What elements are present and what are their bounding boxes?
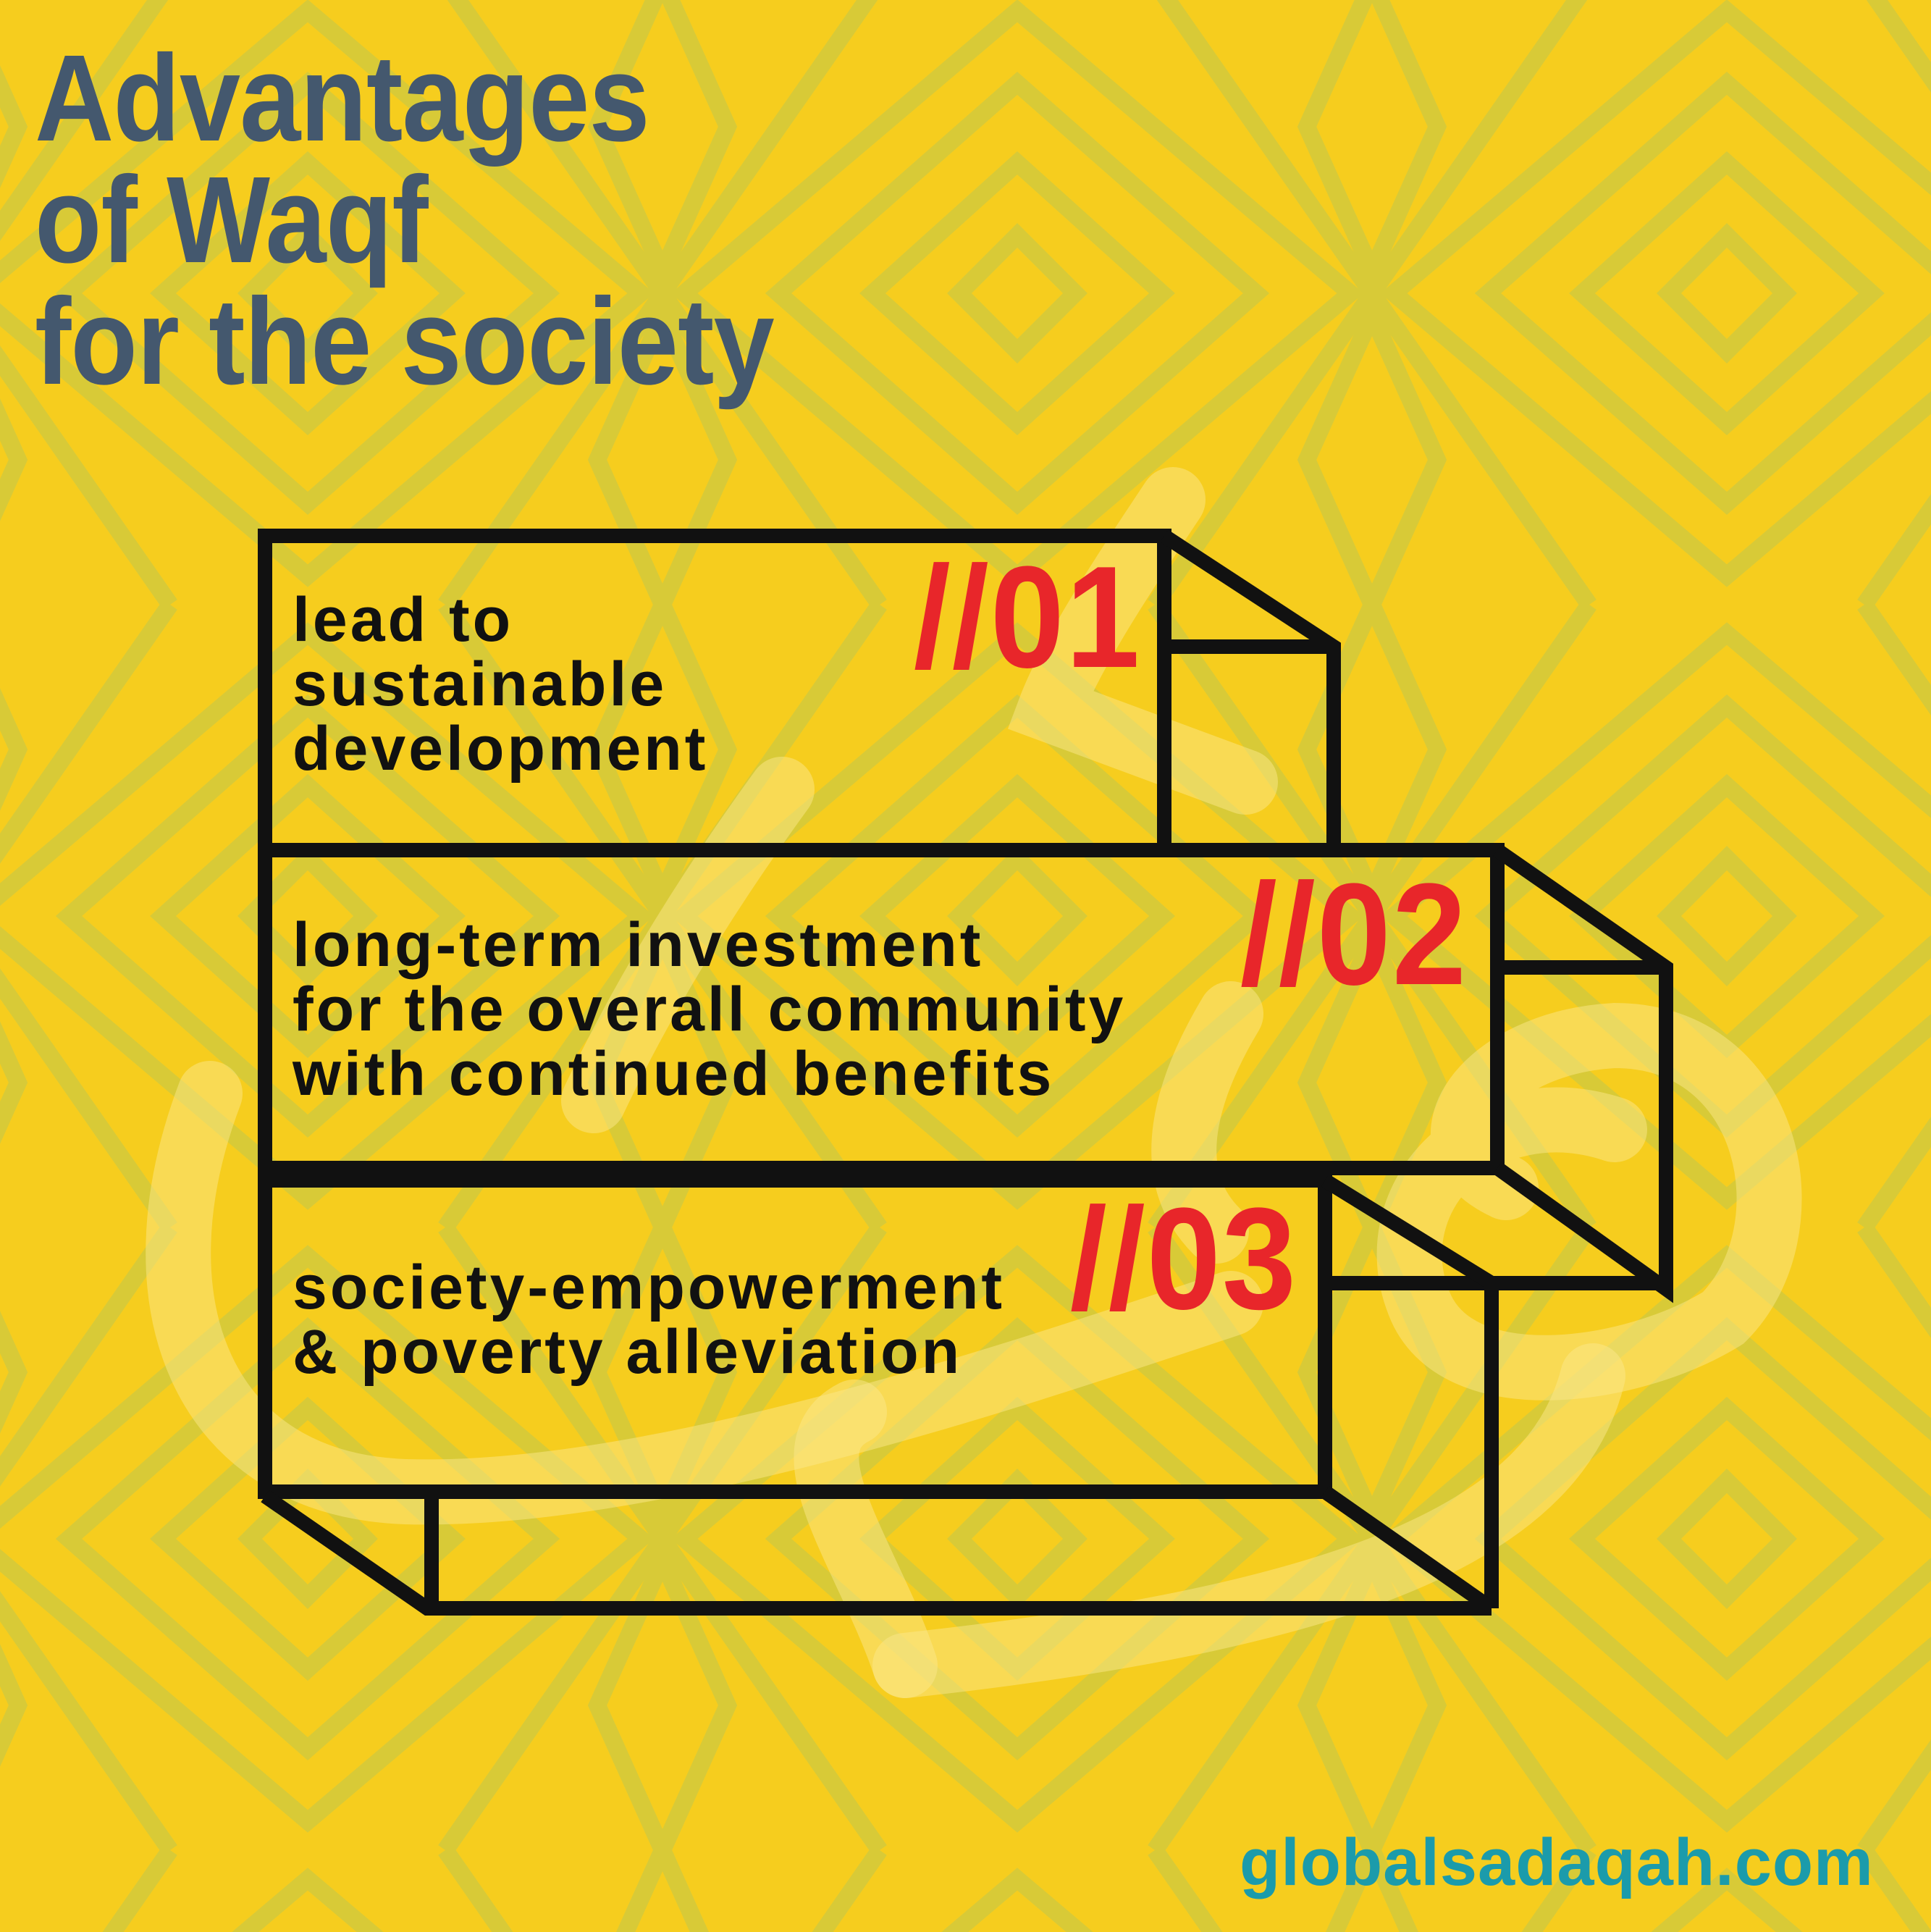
title: for the society bbox=[35, 273, 774, 411]
text 2: long-term investment bbox=[293, 910, 983, 980]
box 2 bbox=[265, 850, 1666, 1289]
title: of Waqf bbox=[35, 151, 428, 289]
number 03: //03 bbox=[1070, 1178, 1297, 1340]
text 3 bbox=[293, 1253, 1005, 1387]
text 2: for the overall community bbox=[293, 975, 1126, 1044]
text 3: & poverty alleviation bbox=[293, 1317, 962, 1387]
number 01: //01 bbox=[914, 537, 1141, 698]
text 1: development bbox=[293, 714, 708, 784]
text 3: society-empowerment bbox=[293, 1253, 1005, 1322]
text 1: sustainable bbox=[293, 650, 667, 719]
text 2: with continued benefits bbox=[293, 1039, 1054, 1109]
footer url: globalsadaqah.com bbox=[1240, 1826, 1874, 1899]
box 1 bbox=[265, 536, 1334, 850]
title bbox=[35, 30, 774, 411]
title: Advantages bbox=[35, 30, 649, 167]
text 2 bbox=[293, 910, 1126, 1109]
text 1: lead to bbox=[293, 585, 513, 655]
box 3 bbox=[265, 1180, 1492, 1608]
number 02: //02 bbox=[1240, 854, 1468, 1015]
text 1 bbox=[293, 585, 708, 784]
